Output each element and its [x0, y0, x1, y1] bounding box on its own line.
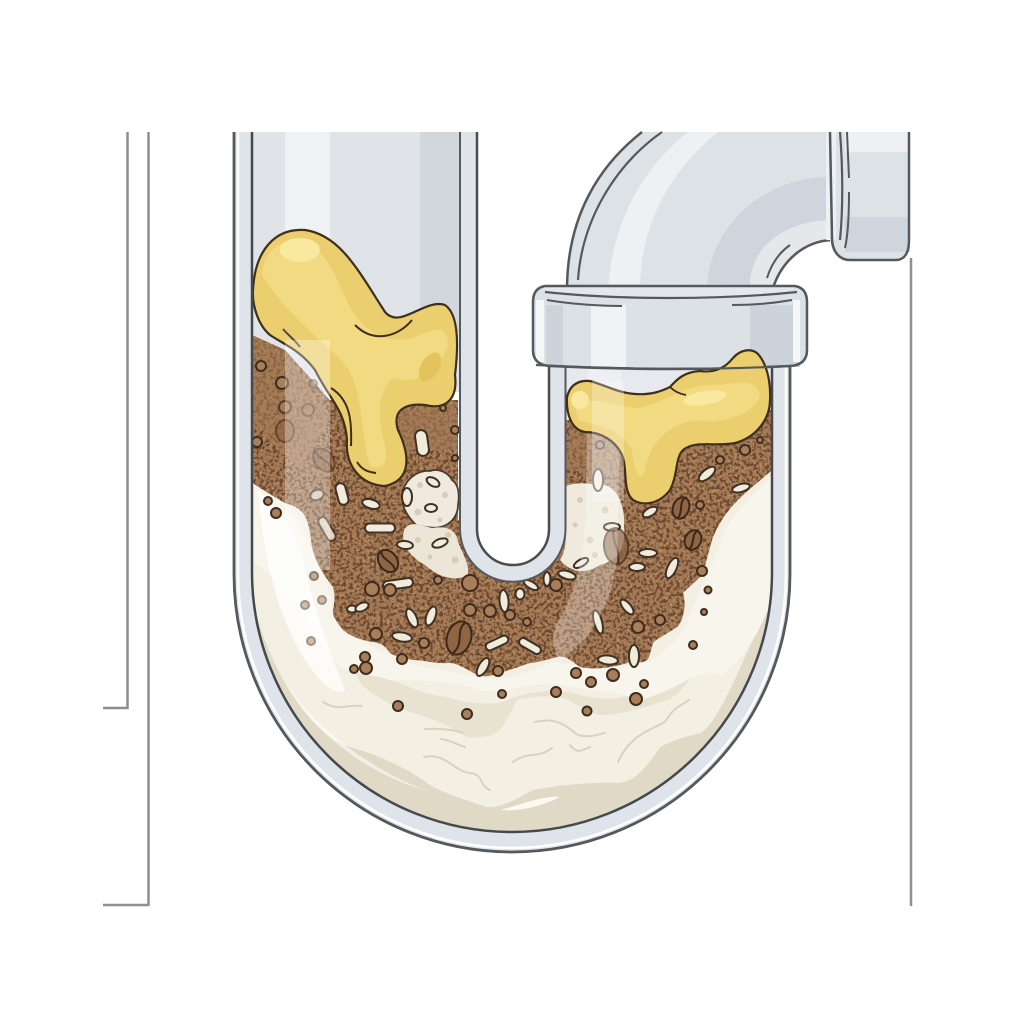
left grease blob: [253, 230, 457, 486]
elbow pipe: [567, 132, 832, 290]
glass interior: left column: [252, 132, 462, 392]
sludge: base cream layer: [252, 470, 772, 840]
glass highlights over contents: [285, 340, 622, 660]
debris contents of the trap: [252, 330, 772, 840]
sludge: wavy lines: [323, 700, 689, 790]
white clumps near the bend: [402, 470, 624, 578]
ringed grounds particles: [252, 361, 763, 719]
collar: [533, 284, 807, 369]
pipe wall outlines: [234, 132, 790, 852]
outer wall of U pipe: [234, 132, 790, 852]
pipe flange: [830, 132, 910, 260]
coffee beans: [276, 420, 704, 658]
right grease blob: [536, 350, 790, 503]
bracket lines: left and right frame: [103, 132, 911, 906]
rice grains: [309, 429, 751, 678]
brown coffee ground layer: [252, 330, 772, 680]
inner bend of the U pipe: [460, 132, 566, 582]
illustration: clogged drain trap: [103, 131, 912, 906]
glass interior: right column: [564, 360, 772, 430]
